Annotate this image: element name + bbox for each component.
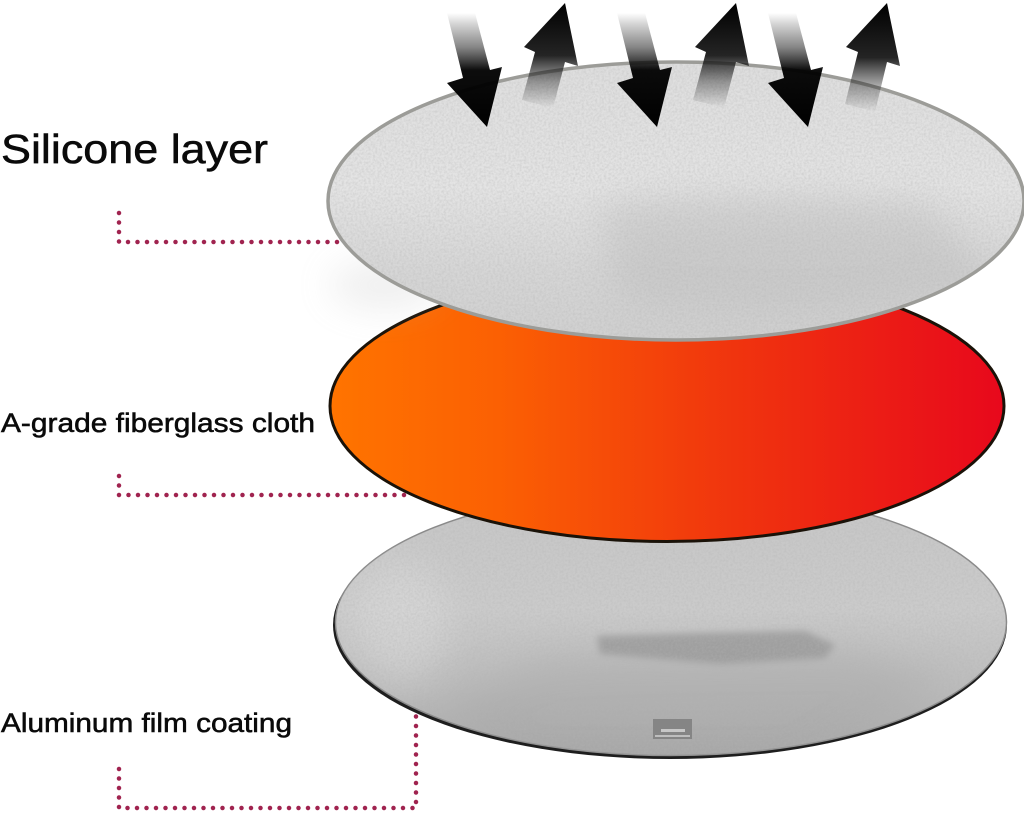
- logo tag: [653, 719, 692, 739]
- top plate: silicone layer: [328, 62, 1024, 340]
- label: aluminum film coating: Aluminum film coating: [1, 708, 292, 738]
- leader line: silicone layer: [119, 213, 338, 242]
- darker lower area: [489, 654, 903, 756]
- dark blotch: [597, 631, 835, 664]
- leader line: fiberglass cloth: [119, 476, 410, 495]
- arrow up 3: [845, 3, 900, 112]
- soft shadow beside top plate: [330, 261, 440, 309]
- label: fiberglass cloth: A-grade fiberglass cloth: [1, 408, 315, 438]
- arrow down 3: [768, 13, 823, 127]
- leader line: aluminum film coating: [119, 714, 416, 808]
- arrows: heat in and out: [447, 3, 900, 127]
- heading: silicone layer: Silicone layer: [1, 126, 268, 172]
- arrow down 2: [617, 13, 672, 127]
- arrow up 2: [693, 3, 749, 108]
- bottom plate: aluminum film coating: [333, 514, 1008, 759]
- arrow down 1: [447, 13, 502, 127]
- lighter left area: [350, 560, 450, 680]
- middle plate: fiberglass cloth: [330, 270, 1004, 542]
- arrow up 1: [522, 3, 578, 108]
